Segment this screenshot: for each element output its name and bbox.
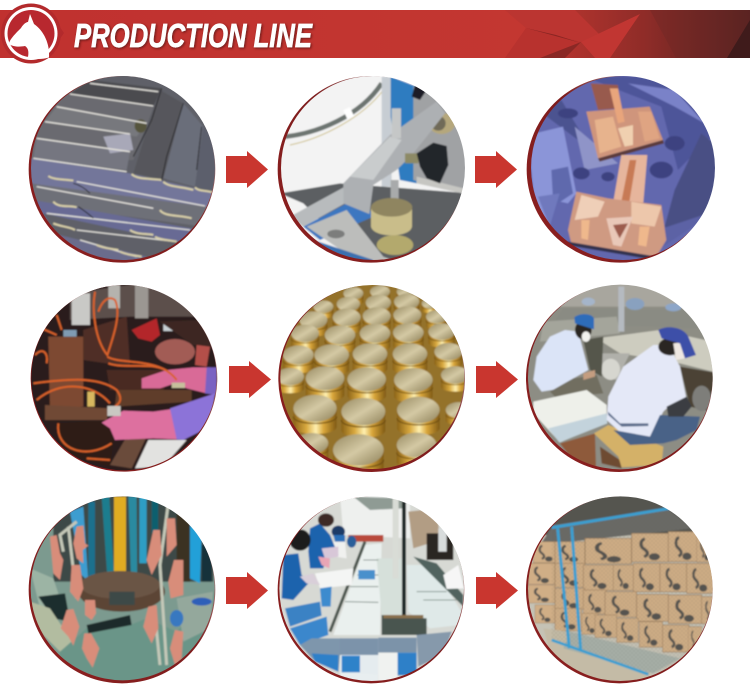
left worker [533, 314, 603, 398]
banner polygon decoration [505, 10, 750, 58]
banner background [0, 10, 750, 58]
operator head [155, 339, 195, 364]
right worker [607, 327, 700, 445]
white bags [315, 568, 353, 588]
crate [533, 390, 607, 442]
floor and tanks [32, 569, 58, 606]
photo circle: packing line [278, 496, 464, 684]
back racks [53, 495, 213, 582]
blue column [382, 77, 392, 187]
arrow 2 [475, 151, 517, 188]
photo circle: brass slugs [278, 285, 465, 472]
grey block [528, 127, 576, 227]
mottled floor texture [558, 108, 685, 182]
floor [57, 420, 117, 467]
pin [392, 108, 401, 138]
pink copper parts [50, 518, 183, 668]
arrow 6 [476, 572, 518, 609]
photo circle: boxed warehouse [520, 485, 727, 692]
brown cabinet and stool [560, 433, 596, 467]
photo circle: casting operator [30, 285, 218, 472]
floor [543, 628, 653, 685]
blue fence frame [552, 508, 670, 674]
arrow 1 [226, 151, 268, 188]
photo circle: casting machine [278, 76, 465, 263]
windows and ceiling [340, 495, 410, 538]
workers [282, 513, 356, 600]
dark lower plate [284, 182, 462, 259]
rotating plate [80, 582, 166, 612]
gloves and sleeve [142, 367, 210, 393]
icon: horse head [9, 14, 49, 59]
hanger bars [60, 503, 168, 665]
logo badge [1, 4, 64, 64]
title: PRODUCTION LINE [74, 17, 313, 54]
orange hoses [33, 292, 177, 460]
cable [285, 83, 382, 137]
arrow 3 [229, 361, 271, 398]
arrow 5 [226, 572, 268, 609]
photo circle: copper moulds [526, 76, 715, 263]
arrow 4 [476, 361, 518, 398]
lower mould [566, 155, 666, 260]
red funnel [132, 318, 160, 342]
vertical pole [402, 502, 406, 615]
photo circle: electroplating [28, 496, 216, 684]
silver arm [290, 187, 345, 227]
packed blue boxes [285, 602, 322, 627]
wire mesh [552, 508, 720, 674]
brass slug [371, 198, 413, 255]
carton stacks [533, 542, 558, 563]
yellow column [114, 497, 126, 583]
right grey stone [664, 134, 715, 228]
rusty block [48, 337, 83, 410]
spring [432, 113, 455, 134]
photo circle: ingots [28, 76, 216, 263]
header banner [0, 4, 750, 64]
upper mould [586, 83, 664, 162]
grinding machine [602, 330, 712, 372]
conveyor tables [333, 543, 382, 635]
upper ingot slabs [32, 90, 152, 160]
lower stacked bands [30, 158, 217, 210]
icon: knob [405, 143, 448, 183]
photo circle: polishing workers [526, 284, 713, 472]
